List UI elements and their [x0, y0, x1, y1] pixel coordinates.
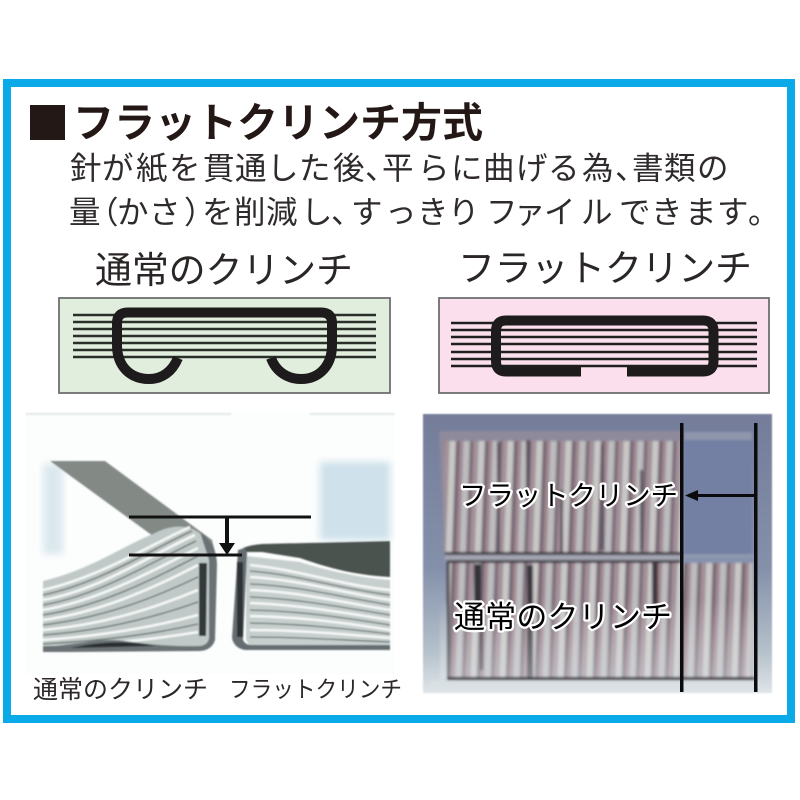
description text: 量（かさ）を削減し、すっきりファイルできます。 [69, 194, 780, 230]
right cover [243, 541, 390, 577]
strap [50, 461, 216, 556]
caption: normal clinch photo: 通常のクリンチ [33, 676, 208, 704]
paper sheets [451, 323, 757, 366]
upper shelf files [444, 441, 682, 553]
label: normal clinch: 通常のクリンチ [454, 600, 672, 635]
paper sheets [73, 315, 376, 357]
staple: flat [496, 320, 714, 372]
upper empty space [684, 432, 752, 554]
blue backgrounds [43, 464, 63, 554]
panel: flat clinch diagram [439, 298, 769, 393]
photo: shelf comparison [423, 414, 772, 693]
title text: フラットクリンチ方式 [73, 100, 483, 146]
right pages [246, 556, 390, 646]
left spine [199, 563, 207, 636]
photo: binder comparison [25, 412, 395, 674]
staple: normal [117, 312, 332, 379]
lower shelf files [447, 560, 753, 678]
description text [69, 150, 780, 230]
height difference arrow [129, 517, 311, 555]
measure line: flat clinch [680, 423, 684, 692]
measure line: normal clinch [754, 423, 758, 692]
left pages [43, 527, 215, 652]
outer frame [7, 83, 791, 719]
label: flat clinch: フラットクリンチ [459, 480, 678, 511]
icon: title square [30, 105, 65, 140]
panel: normal clinch diagram [59, 298, 390, 393]
shelf board [445, 552, 682, 555]
bottom shelf board [447, 677, 755, 680]
heading: flat clinch: フラットクリンチ [458, 248, 752, 289]
upper shelf frame [439, 431, 682, 555]
arrow: space saved [685, 490, 755, 501]
description text: 針が紙を貫通した後、平らに曲げる為、書類の [70, 150, 729, 186]
irregular file gaps [497, 440, 643, 552]
right spine [232, 548, 390, 650]
title [30, 100, 483, 146]
caption: flat clinch photo: フラットクリンチ [229, 676, 402, 702]
heading: normal clinch: 通常のクリンチ [95, 250, 353, 291]
